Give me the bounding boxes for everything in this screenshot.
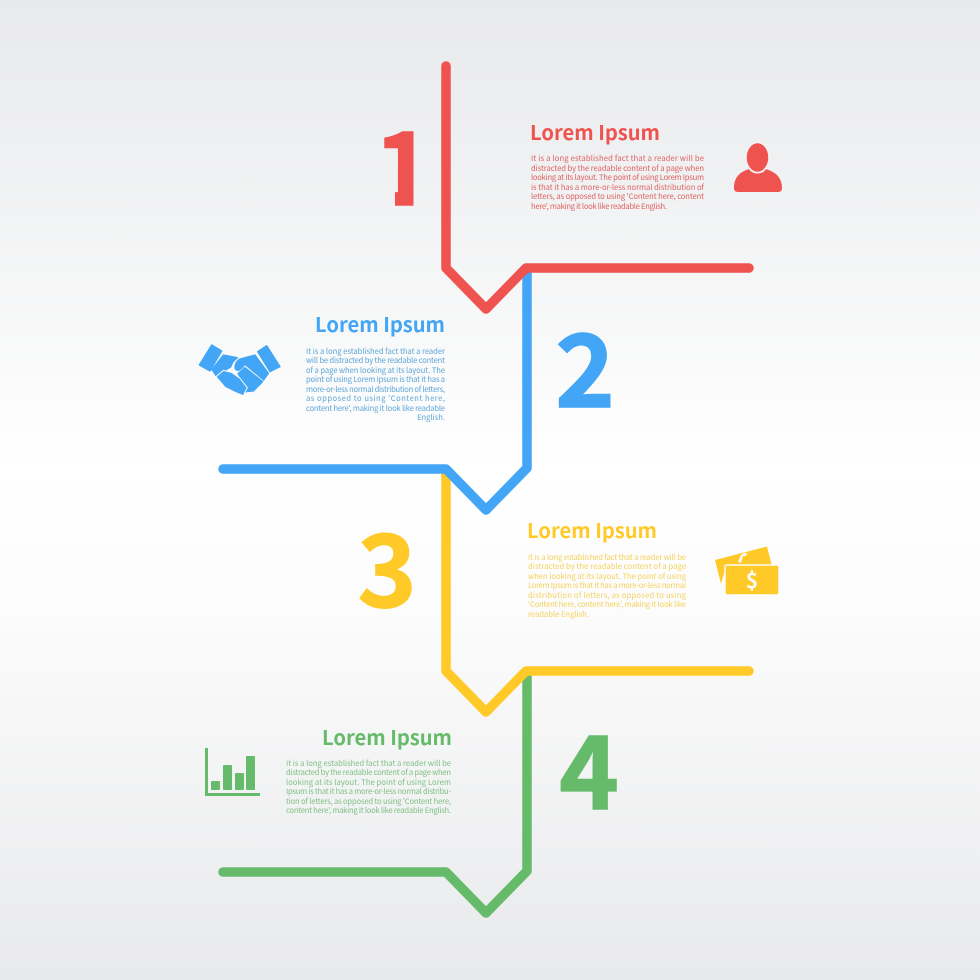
body text 2: of a page when looking at its layout. The	[306, 365, 445, 376]
body text 1: looking at its layout. The point of using Lorem Ipsum	[531, 172, 704, 183]
icon: bar chart	[205, 748, 260, 796]
body text 3: 'Content here, content here', making it look like	[528, 599, 686, 610]
body text 1	[531, 153, 705, 212]
step 3 panel	[357, 491, 779, 637]
blue connector line	[223, 272, 527, 510]
body text 4: Ipsum is that it has a more-or-less normal distribu-	[286, 786, 451, 797]
body text 4: content here', making it look like readable English.	[286, 805, 451, 816]
heading 1: Lorem Ipsum	[530, 116, 660, 146]
number 2: 2	[555, 291, 615, 437]
icon: money	[715, 546, 779, 595]
body text 1: distracted by the readable content of a page when	[531, 163, 704, 174]
yellow connector line	[446, 473, 749, 712]
heading 2: Lorem Ipsum	[315, 308, 445, 338]
body text 3: readable English.	[528, 609, 589, 620]
green connector line	[223, 676, 527, 913]
body text 4: tion of letters, as opposed to using 'Content here,	[286, 796, 451, 807]
body text 3: Lorem Ipsum is that it has a more-or-less normal	[528, 580, 686, 591]
body text 1: It is a long established fact that a reader will be	[531, 153, 704, 164]
body text 2: point of using Lorem Ipsum is that it has a	[306, 374, 445, 385]
step 2 panel	[199, 291, 615, 437]
body text 1: is that it has a more-or-less normal distribution of	[531, 182, 705, 193]
body text 3: distribution of letters, as opposed to using	[528, 590, 687, 601]
body text 2	[306, 346, 445, 423]
body text 4: looking at its layout. The point of using Lorem	[286, 777, 451, 788]
icon: money: $	[746, 565, 758, 595]
body text 4: It is a long established fact that a reader will be	[286, 758, 451, 769]
body text 2: more-or-less normal distribution of letters,	[306, 384, 445, 395]
number 1: 1	[374, 89, 434, 235]
body text 3: distracted by the readable content of a page	[528, 561, 686, 572]
body text 3: when looking at its layout. The point of using	[528, 571, 687, 582]
body text 4: distracted by the readable content of a page when	[286, 767, 451, 778]
body text 3	[528, 552, 687, 620]
body text 2: English.	[417, 412, 445, 423]
heading 3: Lorem Ipsum	[527, 514, 657, 544]
icon: person	[734, 142, 782, 192]
body text 2: as opposed to using 'Content here,	[306, 393, 445, 404]
body text 1: letters, as opposed to using 'Content here, content	[531, 191, 704, 202]
heading 4: Lorem Ipsum	[322, 721, 452, 751]
number 4: 4	[559, 693, 619, 839]
step 4 panel	[205, 693, 619, 839]
body text 2: will be distracted by the readable content	[306, 355, 445, 366]
number 3: 3	[357, 491, 417, 637]
red connector line	[446, 66, 749, 309]
body text 2: It is a long established fact that a reader	[306, 346, 445, 357]
body text 2: content here', making it look like readable	[306, 403, 445, 414]
body text 3: It is a long established fact that a reader will be	[528, 552, 686, 563]
icon: handshake	[199, 345, 280, 396]
body text 1: here', making it look like readable English.	[531, 201, 667, 212]
body text 4	[286, 758, 451, 816]
step 1 panel	[384, 125, 782, 211]
